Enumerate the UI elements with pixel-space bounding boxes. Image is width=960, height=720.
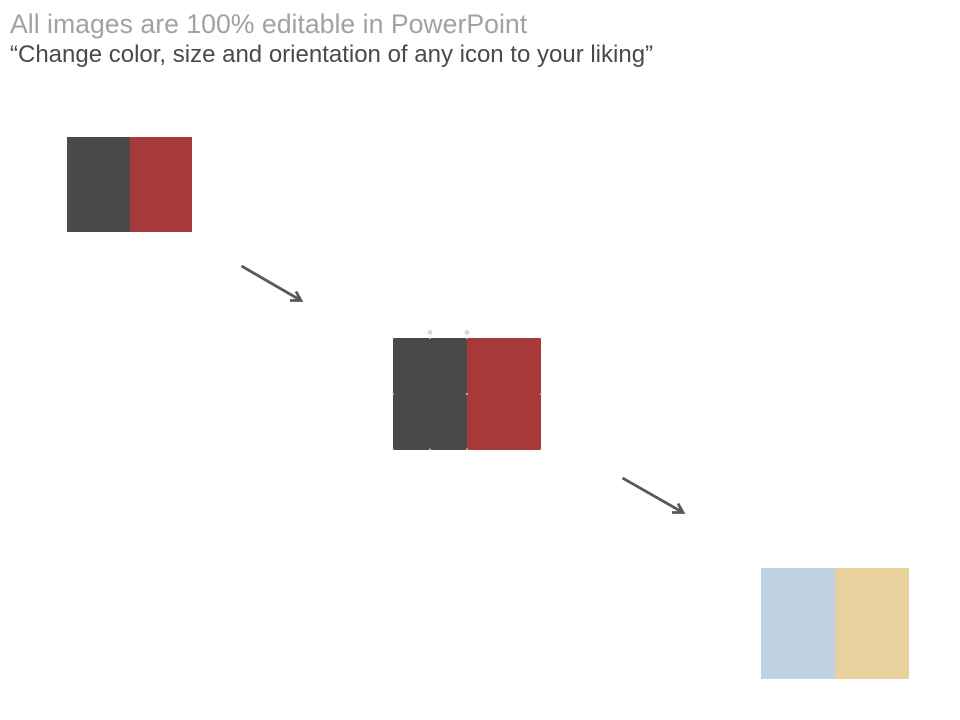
- panel: third block: [761, 568, 909, 679]
- panel: second block: [393, 338, 541, 450]
- first block red half: [130, 137, 192, 232]
- first block dark half: [67, 137, 130, 232]
- panel: first block: [67, 137, 192, 232]
- subtitle: “Change color, size and orientation of any icon to your liking”: [10, 41, 653, 68]
- second block dark half: [393, 338, 467, 450]
- title: All images are 100% editable in PowerPoint: [10, 9, 527, 39]
- third block blue half: [761, 568, 835, 679]
- second block red half: [467, 338, 541, 450]
- third block tan half: [835, 568, 909, 679]
